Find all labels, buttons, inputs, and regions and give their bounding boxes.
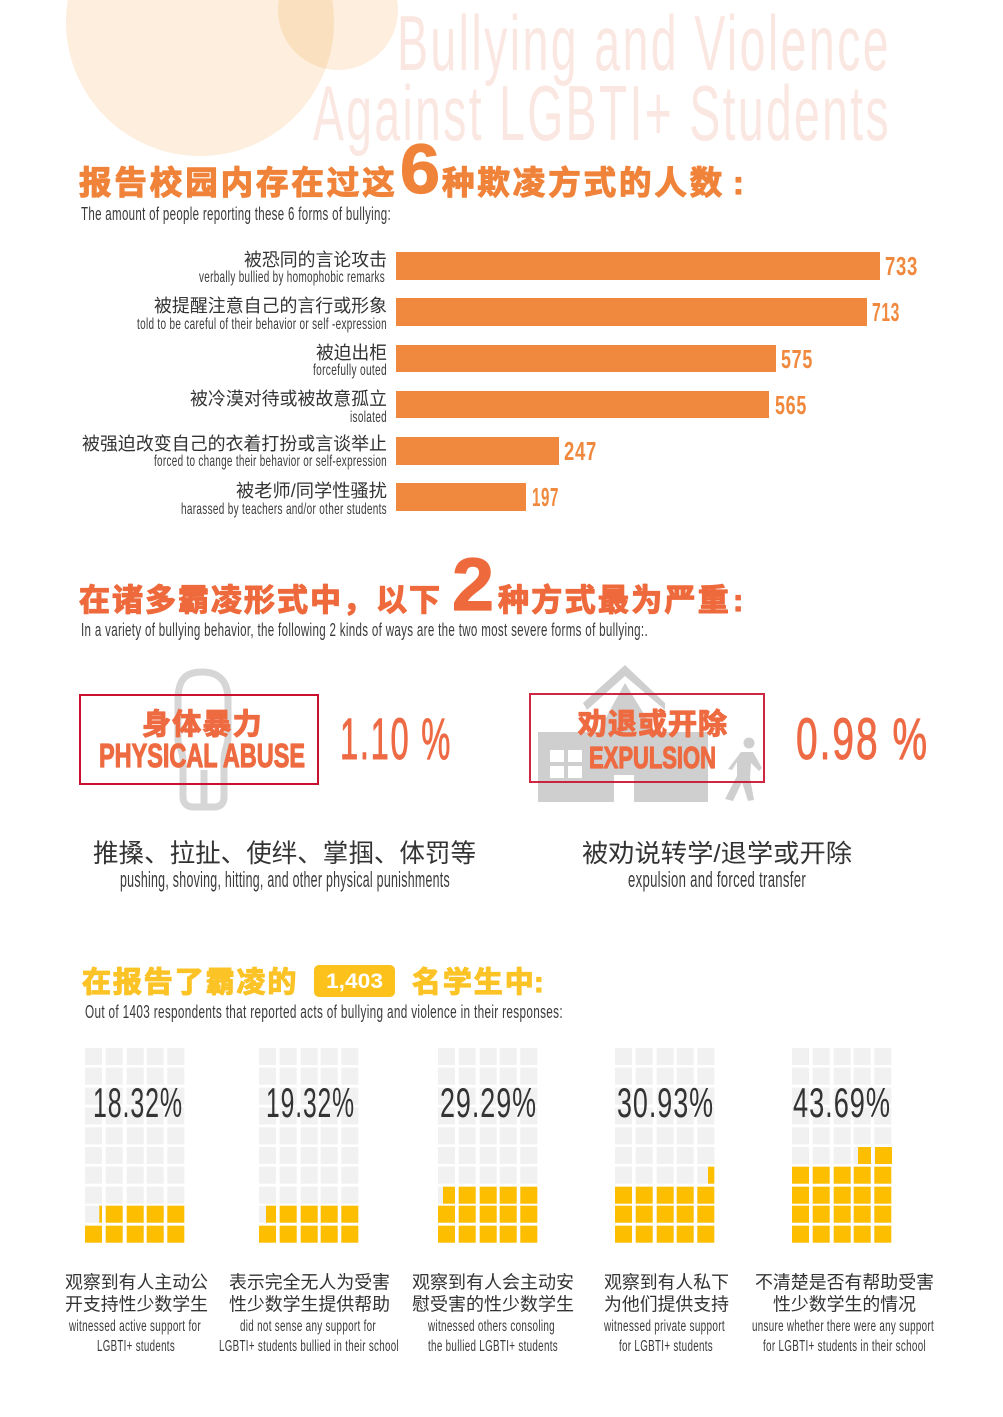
waffle chart: 19.32% xyxy=(259,1048,358,1243)
heading: six forms of bullying: 报告校园内存在过这 xyxy=(79,165,398,201)
decorative header circles xyxy=(66,0,398,156)
label box xyxy=(80,695,318,784)
caption: no support xyxy=(219,1272,399,1355)
caption: unsure xyxy=(752,1272,934,1355)
caption: active support: 开支持性少数学生 xyxy=(65,1294,208,1314)
waffle chart: 30.93% xyxy=(615,1048,714,1243)
bar row: harassed: 197 xyxy=(532,482,559,512)
bar row: forcefully outed: 被迫出柜 xyxy=(316,343,387,363)
heading: six forms of bullying xyxy=(79,130,744,208)
panel: expulsion xyxy=(530,665,929,892)
panel: physical abuse xyxy=(80,672,476,892)
bar row: isolated: 被冷漠对待或被故意孤立 xyxy=(190,389,387,409)
bar row: forcefully outed: 575 xyxy=(781,344,813,374)
bar row: forcefully outed: forcefully outed xyxy=(313,362,387,379)
heading: two most severe forms xyxy=(79,543,743,626)
caption: private support xyxy=(603,1272,729,1355)
bar row: forced to change: 247 xyxy=(564,436,597,466)
label: physical abuse: 身体暴力 xyxy=(142,708,263,741)
bar row: forced to change xyxy=(82,434,597,470)
bar row: harassed: 被老师/同学性骚扰 xyxy=(236,481,387,501)
main title xyxy=(313,0,891,157)
waffle chart: 18.32% xyxy=(85,1048,184,1243)
bar row: forced to change: forced to change their behavior or self-expression xyxy=(154,453,387,470)
heading: two most severe forms: 种方式最为严重 xyxy=(498,583,731,618)
label: physical abuse xyxy=(99,708,305,774)
label box xyxy=(530,694,764,782)
description: physical abuse: 推搡、拉扯、使绊、掌掴、体罚等 xyxy=(93,840,476,868)
heading: two most severe forms: 2 xyxy=(452,543,494,626)
bar row: told to be careful: 713 xyxy=(872,297,900,327)
bar row: isolated: isolated xyxy=(350,409,387,426)
heading: six forms of bullying: 种欺凌方式的人数 xyxy=(442,165,725,201)
bar row: told to be careful: told to be careful of their behavior or self -expression xyxy=(137,316,387,333)
label: physical abuse: PHYSICAL ABUSE xyxy=(99,737,305,774)
heading: two most severe forms: 在诸多霸凌形式中，以下 xyxy=(79,583,442,618)
heading: among 1,403 students xyxy=(82,965,544,999)
heading: six forms of bullying: : xyxy=(733,165,744,201)
bar row: verbally bullied: 被恐同的言论攻击 xyxy=(244,250,387,270)
bar row: forced to change: 被强迫改变自己的衣着打扮或言谈举止 xyxy=(82,434,387,454)
bar row: isolated: 565 xyxy=(775,390,807,420)
heading: among 1,403 students: 在报告了霸凌的 xyxy=(82,966,298,999)
bar row: forcefully outed xyxy=(313,343,813,379)
bar row: verbally bullied: verbally bullied by homophobic remarks xyxy=(199,269,385,286)
waffle chart: 29.29%: 29.29% xyxy=(440,1079,537,1126)
subheading: two forms: In a variety of bullying behavior, the following 2 kinds of ways are the two most severe forms of bullying:. xyxy=(81,620,648,640)
icon: school building and walking person xyxy=(538,665,762,802)
caption: no support: did not sense any support for xyxy=(240,1318,376,1335)
waffle chart: 18.32%: 18.32% xyxy=(93,1079,183,1126)
bar row: isolated xyxy=(190,389,807,426)
caption: no support: 性少数学生提供帮助 xyxy=(229,1294,390,1314)
caption: consoling xyxy=(412,1272,574,1355)
caption: private support: 为他们提供支持 xyxy=(604,1294,729,1314)
bar chart: forms of bullying xyxy=(82,250,918,518)
heading: among 1,403 students: : xyxy=(534,967,544,999)
caption: no support: 表示完全无人为受害 xyxy=(229,1272,390,1292)
value: 0.98 %: 0.98 % xyxy=(796,707,929,772)
label: expulsion: 劝退或开除 xyxy=(578,708,728,741)
caption: consoling: 观察到有人会主动安 xyxy=(412,1272,574,1292)
caption: unsure: 不清楚是否有帮助受害 xyxy=(755,1272,934,1292)
caption: active support xyxy=(65,1272,208,1355)
description: expulsion: 被劝说转学/退学或开除 xyxy=(582,840,852,868)
description: physical abuse: pushing, shoving, hitting, and other physical punishments xyxy=(120,867,450,892)
badge: 1,403 xyxy=(314,965,395,997)
bar row: harassed: harassed by teachers and/or other students xyxy=(181,501,387,518)
caption: private support: 观察到有人私下 xyxy=(604,1272,729,1292)
description: physical abuse xyxy=(93,840,476,892)
bar row: harassed xyxy=(181,481,559,518)
caption: active support: LGBTI+ students xyxy=(97,1338,175,1355)
heading: among 1,403 students: 名学生中 xyxy=(412,966,536,999)
caption: active support: witnessed active support for xyxy=(68,1318,201,1335)
waffle chart: 29.29% xyxy=(438,1048,537,1243)
bar row: told to be careful xyxy=(137,296,900,333)
subheading: respondents: Out of 1403 respondents that reported acts of bullying and violence in their responses: xyxy=(85,1002,563,1022)
caption: consoling: the bullied LGBTI+ students xyxy=(428,1338,558,1355)
subheading: six forms: The amount of people reporting these 6 forms of bullying: xyxy=(81,204,391,224)
value: 1.10 %: 1.10 % xyxy=(340,707,452,772)
waffle chart: 30.93%: 30.93% xyxy=(617,1079,714,1126)
bar row: verbally bullied: 733 xyxy=(885,251,918,281)
label: expulsion xyxy=(578,708,728,775)
waffle chart: 43.69% xyxy=(792,1048,892,1243)
badge: 1,403: 1,403 xyxy=(326,970,383,993)
caption: private support: for LGBTI+ students xyxy=(619,1338,713,1355)
caption: unsure: 性少数学生的情况 xyxy=(773,1294,916,1314)
caption: private support: witnessed private support xyxy=(603,1318,725,1335)
heading: six forms of bullying: 6 xyxy=(400,130,440,208)
caption: consoling: 慰受害的性少数学生 xyxy=(412,1294,574,1314)
caption: no support: LGBTI+ students bullied in their school xyxy=(219,1338,399,1355)
bar row: told to be careful: 被提醒注意自己的言行或形象 xyxy=(154,296,387,316)
label: expulsion: EXPULSION xyxy=(589,740,716,775)
waffle chart: 43.69%: 43.69% xyxy=(793,1079,891,1126)
caption: active support: 观察到有人主动公 xyxy=(65,1272,208,1292)
heading: two most severe forms: : xyxy=(733,583,743,618)
icon: person outline xyxy=(178,672,228,807)
description: expulsion xyxy=(582,840,852,892)
description: expulsion: expulsion and forced transfer xyxy=(628,867,806,892)
bar row: verbally bullied xyxy=(199,250,918,286)
waffle chart: 19.32%: 19.32% xyxy=(266,1079,355,1126)
caption: consoling: witnessed others consoling xyxy=(427,1318,555,1335)
